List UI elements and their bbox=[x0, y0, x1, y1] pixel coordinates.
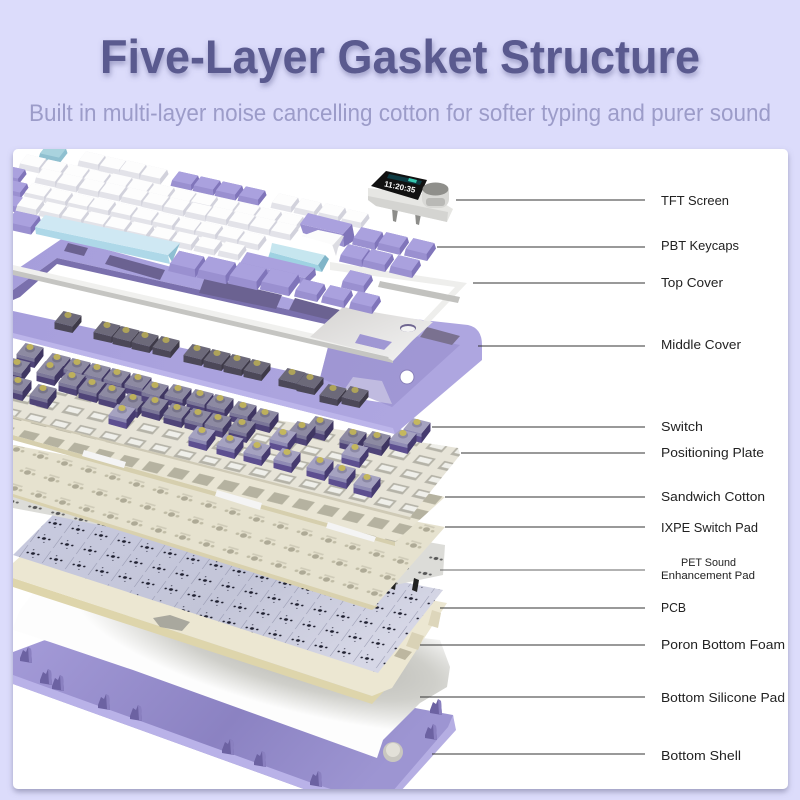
layer: PCB bbox=[13, 513, 443, 673]
callout: PET Sound Enhancement Pad: Enhancement Pad bbox=[661, 570, 755, 582]
layer: positioning plate bbox=[13, 388, 460, 520]
callout: Switch: Switch bbox=[661, 419, 703, 434]
callout: Middle Cover: Middle Cover bbox=[661, 337, 742, 352]
callout: IXPE Switch Pad: IXPE Switch Pad bbox=[661, 520, 758, 535]
letter row Z keycaps bbox=[5, 196, 246, 260]
bottom row modifier keycaps bbox=[168, 251, 300, 296]
purple modifier keycap bbox=[240, 252, 316, 285]
callout: PET Sound Enhancement Pad bbox=[440, 557, 755, 582]
shell button bbox=[383, 742, 403, 762]
callout: Top Cover: Top Cover bbox=[661, 275, 724, 290]
layer: IXPE switch pad bbox=[13, 445, 445, 610]
layer: PET sound enhancement pad bbox=[13, 497, 445, 592]
layer: top cover bbox=[13, 262, 467, 363]
white enter keycap bbox=[302, 230, 344, 256]
callout: Positioning Plate: Positioning Plate bbox=[661, 445, 764, 460]
callout: Poron Bottom Foam: Poron Bottom Foam bbox=[661, 637, 785, 652]
arrow keycaps bbox=[294, 270, 381, 314]
callout: Sandwich Cotton: Sandwich Cotton bbox=[661, 489, 765, 504]
callout: PBT Keycaps: PBT Keycaps bbox=[661, 238, 739, 253]
letter row Q keycaps bbox=[0, 168, 298, 240]
layer: keycaps bbox=[0, 144, 436, 314]
exploded keyboard illustration bbox=[0, 144, 482, 792]
blue shift keycap bbox=[268, 243, 329, 272]
backspace keycap bbox=[300, 213, 355, 247]
callout: PCB: PCB bbox=[661, 600, 686, 615]
blue spacebar bbox=[35, 215, 180, 264]
panel: white card bbox=[13, 149, 788, 789]
layer: poron bottom foam bbox=[13, 557, 447, 704]
TFT screen module bbox=[368, 171, 453, 225]
layer: switches below the cover bbox=[4, 343, 430, 498]
volume knob bbox=[422, 182, 449, 208]
title: Five-Layer Gasket Structure bbox=[100, 30, 700, 83]
callout: Bottom Silicone Pad: Bottom Silicone Pad bbox=[661, 690, 785, 705]
number row keycaps bbox=[13, 157, 304, 229]
function row keycaps bbox=[38, 144, 370, 228]
layer: bottom shell bbox=[13, 640, 456, 792]
layer: bottom silicone pad bbox=[44, 613, 450, 758]
layer: switches seen above the cover band bbox=[54, 311, 368, 408]
callout: PET Sound Enhancement Pad: PET Sound bbox=[681, 557, 736, 569]
layer: middle cover bbox=[13, 238, 482, 434]
callout: Bottom Shell: Bottom Shell bbox=[661, 748, 741, 763]
layer: sandwich cotton bbox=[13, 405, 445, 546]
callout: TFT Screen: TFT Screen bbox=[661, 193, 729, 208]
subtitle: Built in multi-layer noise cancelling cotton for softer typing and purer sound bbox=[29, 100, 771, 127]
letter row A keycaps bbox=[13, 188, 266, 250]
navigation cluster keycaps bbox=[339, 227, 436, 278]
screen clock: 11:20:35 bbox=[383, 179, 417, 195]
